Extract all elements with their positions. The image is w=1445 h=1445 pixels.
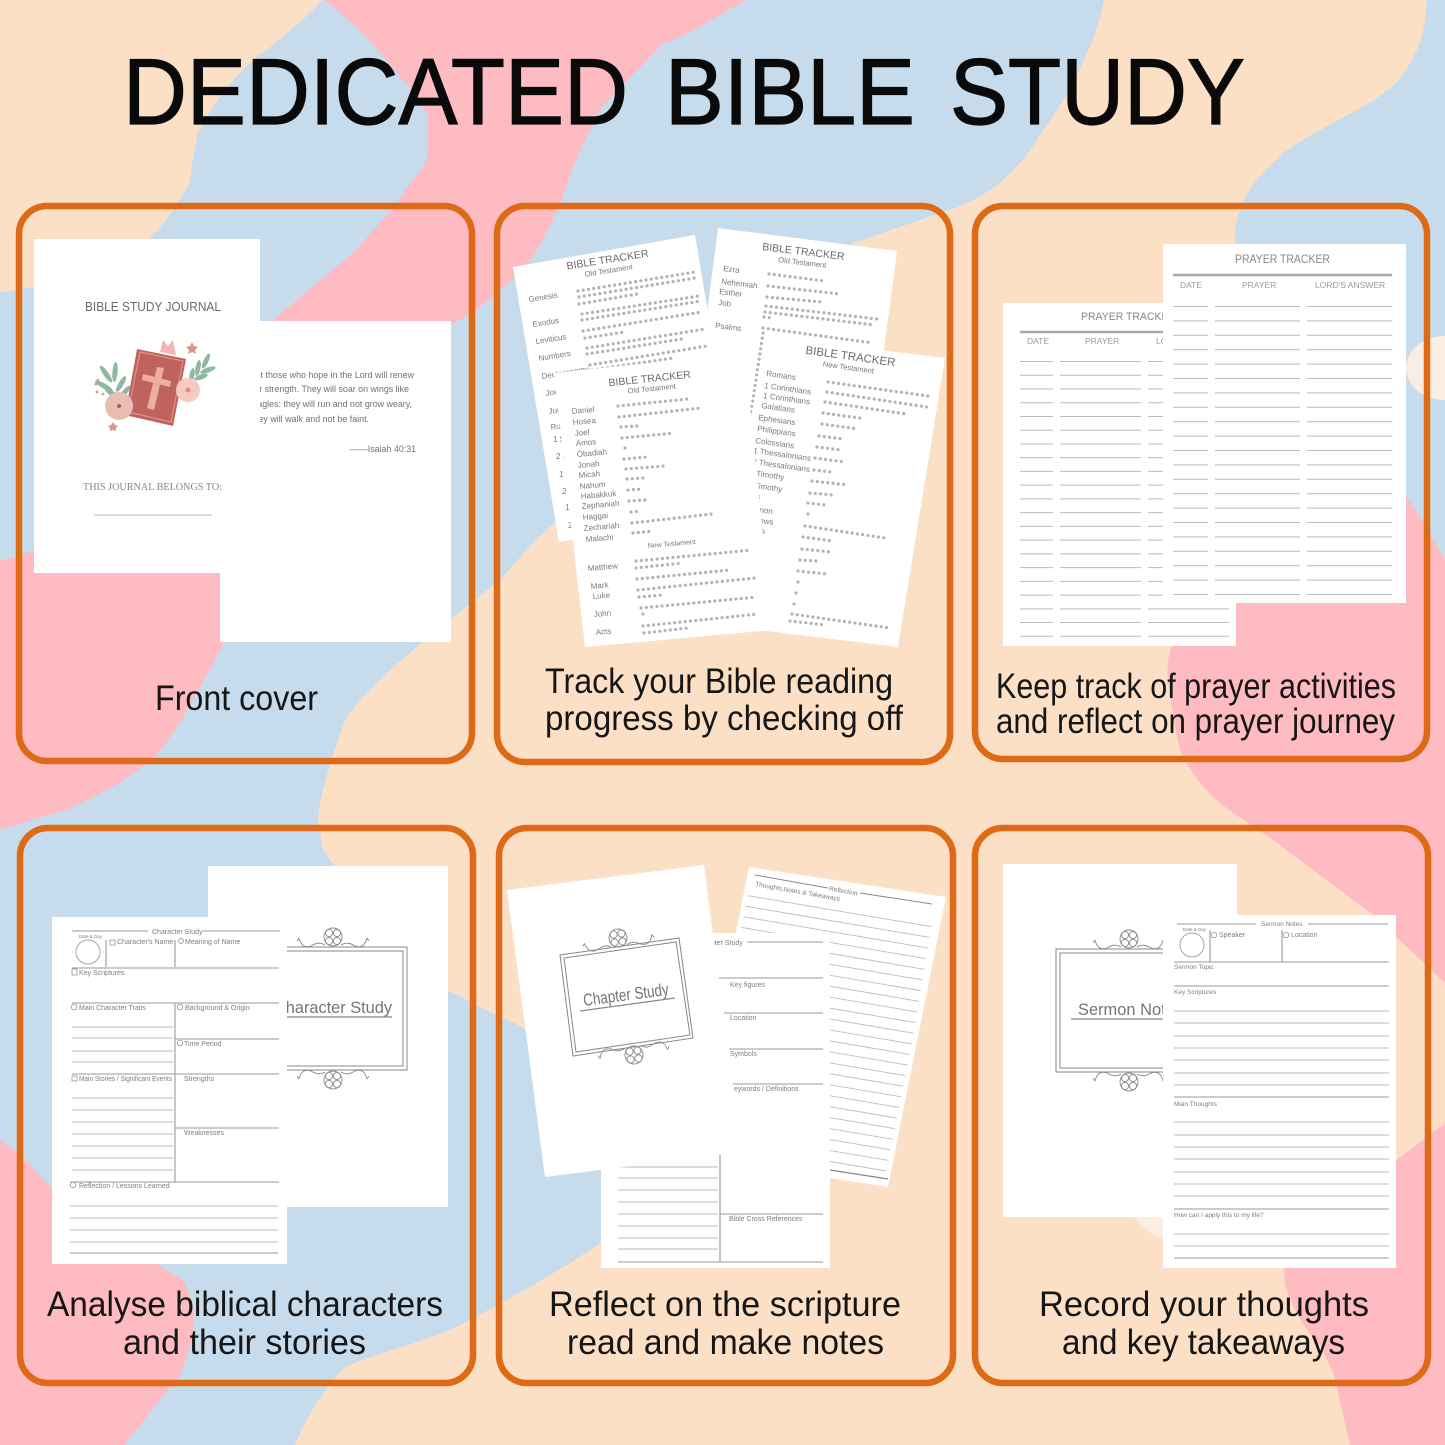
page: tracker genesis: Numbers — [538, 349, 571, 363]
caption — [1039, 1285, 1369, 1362]
caption — [545, 662, 903, 738]
page: sermon notes cover: Sermon Notes — [1078, 1000, 1183, 1019]
panel border — [497, 206, 950, 762]
page: tracker new testament: New Testament — [822, 359, 875, 376]
caption: Analyse biblical characters — [47, 1285, 443, 1324]
icon: floral bible illustration — [94, 340, 216, 431]
page: scripture quote: But those who hope in the Lord will renew — [250, 370, 415, 380]
page: tracker prophets and gospels: Haggai — [582, 511, 609, 522]
page: scripture quote: eagles: they will run and not grow weary, — [252, 399, 412, 409]
page: chapter study cover: Chapter Study — [582, 980, 670, 1010]
panel border — [20, 828, 473, 1383]
caption — [47, 1285, 443, 1362]
page: character study worksheet: Character Study — [152, 929, 203, 936]
page: tracker prophets and gospels: Habakkuk — [580, 489, 618, 501]
page: sermon notes worksheet: Sermon Notes — [1261, 921, 1303, 928]
page: chapter worksheet: eywords / Definitions — [734, 1086, 799, 1093]
panel border — [975, 206, 1427, 759]
page: sermon notes worksheet: Speaker — [1219, 932, 1246, 939]
page: sermon notes worksheet: How can I apply this to my life? — [1174, 1212, 1264, 1219]
page: tracker new testament: 1 Thessalonians — [753, 446, 812, 463]
page: tracker prophets and gospels: Luke — [592, 590, 611, 601]
page: tracker ezra-psalms: Old Testament — [778, 255, 828, 270]
panel: chapter study — [499, 828, 953, 1383]
page: tracker genesis: 1 I — [559, 470, 568, 479]
page: tracker new testament: BIBLE TRACKER — [805, 345, 896, 369]
page: tracker prophets and gospels: Old Testament — [627, 381, 677, 396]
caption: Record your thoughts — [1039, 1285, 1369, 1324]
page: tracker new testament: Romans — [766, 369, 796, 382]
page: character study cover: Character Study — [274, 998, 392, 1017]
page: journal cover — [34, 239, 260, 573]
page: tracker new testament: s — [756, 492, 760, 501]
page: character study worksheet: Time Period — [184, 1041, 222, 1048]
page: sermon notes worksheet — [1163, 915, 1396, 1268]
page: tracker genesis: Deuteronomy — [541, 365, 590, 381]
page: tracker ezra-psalms: Esther — [719, 287, 743, 299]
page: tracker new testament: Galatians — [761, 401, 795, 415]
page: tracker prophets and gospels: Nahum — [579, 480, 606, 491]
panel border — [499, 828, 953, 1383]
page: scripture quote: ——Isaiah 40:31 — [350, 444, 416, 454]
page: character study worksheet: Strengths — [184, 1076, 214, 1083]
page: tracker new testament: Philippians — [757, 424, 796, 438]
page: tracker genesis: 2 — [562, 487, 567, 496]
page: tracker genesis: 1 S — [553, 435, 565, 444]
page: tracker prophets and gospels: BIBLE TRACKER — [608, 369, 692, 389]
page: character study worksheet: Date & Day — [79, 934, 103, 939]
caption: read and make notes — [567, 1323, 884, 1362]
page: tracker prophets and gospels: Mark — [590, 580, 610, 591]
title: DEDICATED — [123, 39, 628, 144]
page: sermon notes cover — [1003, 864, 1237, 1217]
page: sermon notes worksheet: Main Thoughts — [1174, 1101, 1218, 1108]
page: character study worksheet: Background & Origin — [185, 1005, 250, 1012]
page: character study worksheet: Reflection / Lessons Learned — [79, 1183, 170, 1190]
page: sermon notes worksheet: Location — [1291, 932, 1318, 939]
page: chapter study cover — [507, 865, 741, 1177]
page: character study worksheet — [52, 917, 287, 1264]
page: tracker genesis: Juc — [548, 405, 562, 416]
page: scripture quote: they will walk and not be faint. — [251, 414, 369, 424]
page: tracker prophets and gospels: Amos — [575, 437, 597, 448]
caption — [996, 667, 1396, 741]
caption: Front cover — [155, 679, 318, 718]
page: reflection notes: Thoughts,Notes & Takeaways — [755, 881, 841, 903]
page: prayer tracker back: PRAYER TRACKER — [1081, 311, 1176, 323]
page: tracker ezra-psalms: Job — [718, 298, 732, 309]
page: tracker prophets and gospels: Malachi — [585, 533, 614, 544]
page: tracker new testament: 1 Corinthians — [764, 381, 812, 397]
page: tracker prophets and gospels: Hosea — [572, 416, 597, 427]
page: journal cover: THIS JOURNAL BELONGS TO: — [83, 482, 222, 493]
page: tracker genesis: Old Testament — [584, 262, 634, 279]
page: tracker genesis: Leviticus — [535, 332, 567, 346]
page: tracker new testament: s — [761, 527, 765, 536]
page: tracker genesis: BIBLE TRACKER — [566, 248, 650, 272]
caption: Reflect on the scripture — [549, 1285, 901, 1324]
page: tracker genesis: 2 — [568, 521, 573, 530]
page: journal cover: BIBLE STUDY JOURNAL — [85, 299, 221, 314]
page: prayer tracker back — [1003, 303, 1236, 646]
page: tracker prophets and gospels: Obadiah — [576, 447, 607, 459]
page: tracker ezra-psalms: Nehemiah — [721, 277, 758, 290]
title — [123, 39, 1245, 144]
panel border — [19, 206, 472, 761]
page: character study worksheet: Main Character Traits — [79, 1005, 146, 1012]
page: scripture quote — [220, 321, 451, 642]
page: tracker new testament — [716, 336, 945, 647]
page: tracker new testament: mon — [757, 505, 773, 516]
page: chapter worksheet: Key figures — [730, 982, 766, 989]
panel border — [975, 828, 1428, 1383]
page: tracker genesis — [513, 235, 741, 542]
page: scripture quote: their strength. They will soar on wings like — [245, 384, 409, 394]
page: tracker prophets and gospels: Joel — [574, 428, 590, 438]
caption: progress by checking off — [545, 699, 903, 738]
page: character study worksheet: Character's Name — [117, 939, 173, 946]
page: tracker prophets and gospels: Matthew — [587, 561, 619, 573]
page: chapter worksheet: Chapter Study — [698, 940, 743, 947]
page: tracker prophets and gospels: Acts — [595, 627, 612, 637]
page: chapter worksheet — [601, 933, 830, 1268]
page: tracker prophets and gospels: Jonah — [577, 459, 600, 470]
page: tracker genesis: 1 — [565, 503, 570, 512]
page: tracker genesis: Genesis — [528, 290, 558, 304]
page: character study worksheet: Main Stories / Significant Events — [79, 1076, 172, 1083]
page: tracker genesis: 2 S — [556, 452, 568, 461]
page: tracker ezra-psalms: Ezra — [723, 264, 741, 275]
page: tracker new testament: Timothy — [754, 481, 783, 494]
page: tracker new testament: 2 Thessalonians — [752, 457, 811, 474]
page: prayer tracker front: LORD'S ANSWER — [1315, 280, 1385, 290]
page: prayer tracker back: LORD'S ANSWER — [1156, 336, 1226, 346]
page: tracker prophets and gospels: New Testament — [648, 539, 696, 550]
page: tracker ezra-psalms: BIBLE TRACKER — [762, 241, 846, 263]
page: chapter worksheet: Location — [730, 1015, 757, 1022]
page: tracker new testament: Ephesians — [758, 413, 796, 427]
page: prayer tracker front: DATE — [1180, 280, 1202, 290]
caption: and their stories — [123, 1323, 366, 1362]
page: tracker new testament: 1 Corinthians — [763, 391, 811, 407]
title: STUDY — [950, 39, 1245, 144]
page: sermon notes worksheet: Date & Day — [1183, 927, 1207, 932]
title: BIBLE — [665, 39, 915, 144]
page: tracker prophets and gospels: John — [593, 609, 611, 619]
page: prayer tracker front — [1163, 244, 1406, 603]
page: chapter worksheet: Symbols — [730, 1051, 757, 1058]
page: tracker ezra-psalms — [682, 228, 897, 530]
page: prayer tracker front: PRAYER TRACKER — [1235, 254, 1330, 266]
page: sermon notes worksheet: Sermon Topic — [1174, 964, 1214, 971]
page: tracker prophets and gospels: Micah — [578, 469, 600, 480]
caption: Track your Bible reading — [545, 662, 893, 701]
page: tracker new testament: ews — [759, 516, 774, 527]
page: prayer tracker back: PRAYER — [1085, 336, 1119, 346]
page: tracker genesis: Exodus — [532, 316, 560, 329]
caption: and key takeaways — [1062, 1323, 1345, 1362]
page: tracker new testament: Colossians — [755, 436, 795, 450]
page: prayer tracker front: PRAYER — [1242, 280, 1276, 290]
page: tracker genesis: Joel — [545, 387, 561, 398]
panel: front cover — [19, 206, 472, 761]
page: prayer tracker back: DATE — [1027, 336, 1049, 346]
page: character study worksheet: Weaknesses — [184, 1130, 224, 1137]
page: sermon notes worksheet: Key Scriptures — [1174, 989, 1217, 996]
panel: prayer tracker — [975, 206, 1427, 759]
panel: sermon notes — [975, 828, 1428, 1383]
page: character study worksheet: Key Scriptures — [79, 970, 125, 977]
page: chapter worksheet: Bible Cross References — [729, 1216, 803, 1223]
page: tracker prophets and gospels: Zechariah — [583, 521, 620, 533]
caption: Keep track of prayer activities — [996, 667, 1396, 706]
page: tracker genesis: Ru — [550, 421, 561, 432]
caption — [549, 1285, 901, 1362]
page: character study cover — [208, 866, 448, 1207]
page: reflection notes: Reflection — [828, 886, 858, 898]
panel: bible tracker — [497, 206, 950, 762]
page: tracker prophets and gospels — [554, 353, 772, 647]
page: tracker new testament: Timothy — [756, 469, 785, 482]
page: tracker ezra-psalms: Psalms — [715, 321, 742, 333]
page: reflection notes — [736, 867, 946, 1187]
caption: and reflect on prayer journey — [996, 702, 1395, 741]
page: tracker prophets and gospels: Zephaniah — [581, 499, 620, 511]
panel: character study — [20, 828, 473, 1383]
page: tracker prophets and gospels: Daniel — [571, 405, 595, 416]
page: character study worksheet: Meaning of Name — [185, 939, 240, 946]
